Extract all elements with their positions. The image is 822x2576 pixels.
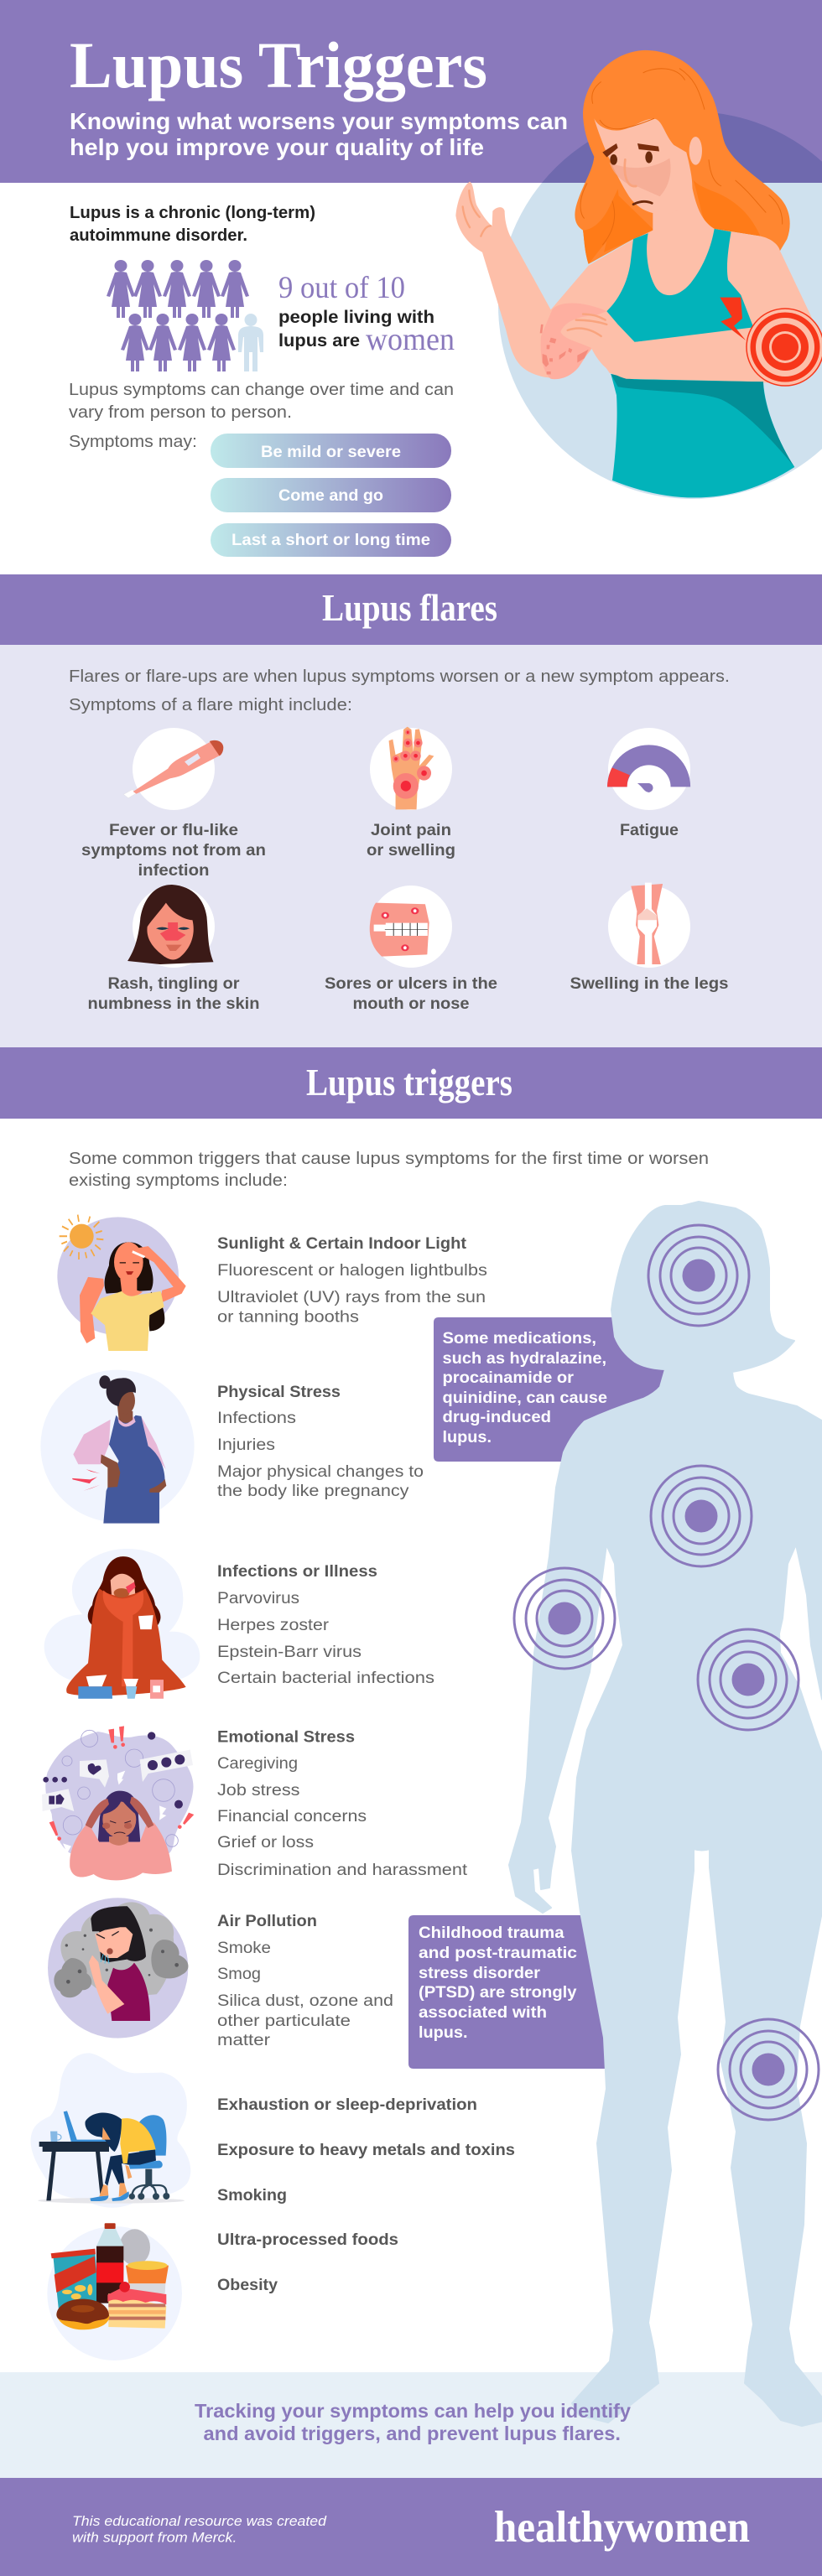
list: physical stress	[217, 1384, 424, 1500]
callout: medications text	[443, 1330, 607, 1446]
header band	[0, 0, 822, 183]
callout: medications background	[434, 1317, 671, 1462]
list: physical stress: Infections	[217, 1410, 296, 1427]
intro definition	[70, 203, 315, 245]
list: other triggers: Exhaustion or sleep-deprivation	[217, 2096, 477, 2114]
icon circles	[133, 728, 690, 968]
text block: symptoms change	[69, 380, 454, 451]
pill: be mild or severe: Be mild or severe	[261, 444, 401, 461]
label: fever: symptoms not from an	[81, 841, 266, 860]
icon: thermometer	[123, 740, 223, 798]
statistic: 9 out of 10	[278, 271, 455, 357]
list: infections or illness: Parvovirus	[217, 1590, 299, 1607]
list: sunlight and indoor light: Fluorescent or halogen lightbulbs	[217, 1262, 487, 1280]
list: emotional stress: Emotional Stress	[217, 1729, 355, 1746]
body silhouette	[509, 1202, 822, 2426]
text block: symptoms change: Lupus symptoms can change over time and can	[69, 380, 454, 399]
icon: hand with joint pain	[389, 727, 434, 809]
illustration: woman with rash and arm pain	[455, 50, 815, 497]
list: sunlight and indoor light: Sunlight & Certain Indoor Light	[217, 1235, 467, 1253]
section heading: lupus flares	[0, 574, 822, 645]
section heading: lupus triggers: Lupus triggers	[306, 1061, 512, 1104]
panel: lupus triggers	[0, 1047, 822, 2478]
icon: bullseye abdomen	[698, 1629, 799, 1730]
list: emotional stress: Discrimination and harassment	[217, 1862, 468, 1879]
sponsor note: This educational resource was created	[72, 2514, 327, 2529]
label: rash: numbness in the skin	[87, 995, 260, 1013]
list: physical stress: Injuries	[217, 1436, 275, 1454]
subtitle	[70, 108, 568, 160]
pill: be mild or severe	[211, 434, 451, 468]
callout: trauma text: and post-traumatic	[419, 1945, 577, 1962]
panel: header and introduction	[0, 0, 822, 557]
callout: trauma text: associated with	[419, 2004, 547, 2022]
label: rash: Rash, tingling or	[107, 974, 240, 993]
illustration: exhausted woman at desk	[31, 2053, 190, 2208]
pill: come and go	[211, 478, 451, 512]
label: swelling: Swelling in the legs	[570, 974, 729, 993]
label: fatigue: Fatigue	[620, 821, 679, 839]
list: other triggers: Ultra-processed foods	[217, 2231, 398, 2249]
text block: symptoms change: Symptoms may:	[69, 432, 197, 451]
list: other triggers: Obesity	[217, 2277, 278, 2294]
sponsor note: with support from Merck.	[72, 2531, 237, 2546]
list: infections or illness: Epstein-Barr virus	[217, 1644, 362, 1661]
list: physical stress: Physical Stress	[217, 1384, 341, 1401]
subtitle: Knowing what worsens your symptoms can	[70, 108, 568, 134]
flares intro text: Flares or flare-ups are when lupus symptoms worsen or a new symptom appears.	[69, 667, 730, 686]
pill: last a short or long time: Last a short or long time	[232, 532, 430, 549]
list: other triggers	[217, 2096, 515, 2294]
icon: bullseye head	[648, 1225, 749, 1326]
callout: trauma text: stress disorder	[419, 1965, 541, 1982]
list: other triggers: Smoking	[217, 2187, 287, 2205]
callout: medications text: procainamide or	[443, 1369, 575, 1387]
list: sunlight and indoor light	[217, 1235, 487, 1327]
list: sunlight and indoor light: or tanning booths	[217, 1308, 359, 1327]
pill: come and go: Come and go	[278, 487, 383, 505]
list: emotional stress: Grief or loss	[217, 1834, 314, 1852]
icon: bullseye arm	[514, 1568, 615, 1669]
list: air pollution: other particulate	[217, 2012, 351, 2030]
list: emotional stress: Job stress	[217, 1782, 300, 1800]
callout: medications text: such as hydralazine,	[443, 1350, 606, 1368]
label: rash	[87, 974, 260, 1013]
footer band	[0, 2478, 822, 2576]
flares background	[0, 645, 822, 1047]
sponsor note	[72, 2514, 327, 2546]
illustration: woman in sunlight	[57, 1215, 186, 1351]
label: sores	[325, 974, 497, 1013]
label: fever: infection	[138, 861, 210, 880]
illustration: sick woman in blanket	[44, 1549, 200, 1699]
list: emotional stress: Financial concerns	[217, 1808, 367, 1826]
icon: face with facial rash	[127, 885, 213, 964]
illustration circle backdrop	[498, 112, 822, 499]
subtitle: help you improve your quality of life	[70, 134, 484, 160]
callout: trauma text: Childhood trauma	[419, 1924, 564, 1942]
illustration: pregnant woman with back pain	[40, 1370, 195, 1524]
label: joint pain: or swelling	[367, 841, 455, 860]
tracking message: and avoid triggers, and prevent lupus flares.	[203, 2423, 621, 2444]
list: emotional stress	[217, 1729, 468, 1879]
list: physical stress: Major physical changes to	[217, 1463, 424, 1481]
section heading: lupus flares: Lupus flares	[322, 586, 497, 629]
label: joint pain: Joint pain	[371, 821, 451, 839]
list: sunlight and indoor light: Ultraviolet (UV) rays from the sun	[217, 1289, 486, 1306]
list: air pollution: Smog	[217, 1966, 261, 1983]
callout: medications text: Some medications,	[443, 1330, 596, 1348]
statistic: 9 out of 10: women	[366, 322, 455, 357]
list: air pollution: Air Pollution	[217, 1913, 317, 1930]
tracking message	[195, 2400, 631, 2444]
illustration: woman coughing in air pollution	[48, 1898, 188, 2038]
list: other triggers: Exposure to heavy metals and toxins	[217, 2142, 515, 2159]
label: sores: Sores or ulcers in the	[325, 974, 497, 993]
panel: lupus flares	[0, 574, 822, 1047]
statistic: 9 out of 10: people living with	[278, 308, 434, 327]
icon: fatigue gauge	[607, 745, 690, 792]
circle overlap on header	[542, 112, 822, 183]
list: air pollution: matter	[217, 2032, 271, 2049]
list: infections or illness	[217, 1563, 434, 1687]
list: infections or illness: Certain bacterial infections	[217, 1670, 434, 1687]
intro definition: Lupus is a chronic (long-term)	[70, 203, 315, 222]
tracking band	[0, 2372, 822, 2478]
list: air pollution: Smoke	[217, 1940, 271, 1957]
flares intro text	[69, 667, 730, 714]
icon: bullseye chest	[651, 1466, 752, 1566]
callout: medications text: lupus.	[443, 1429, 492, 1446]
triggers intro text	[69, 1149, 709, 1190]
panel: footer	[0, 2478, 822, 2576]
statistic: 9 out of 10: lupus are	[278, 331, 360, 351]
label: joint pain	[367, 821, 455, 860]
list: air pollution: Silica dust, ozone and	[217, 1992, 393, 2010]
callout: medications text: quinidine, can cause	[443, 1389, 607, 1407]
list: infections or illness: Infections or Illness	[217, 1563, 377, 1581]
tracking message: Tracking your symptoms can help you identify	[195, 2400, 631, 2422]
intro definition: autoimmune disorder.	[70, 226, 247, 245]
triggers intro text: existing symptoms include:	[69, 1171, 288, 1190]
icon: ten people pictogram	[107, 260, 263, 371]
pill: last a short or long time	[211, 523, 451, 557]
flares intro text: Symptoms of a flare might include:	[69, 695, 352, 714]
label: fever: Fever or flu-like	[109, 821, 238, 839]
icon: mouth with sores	[370, 903, 429, 957]
callout: trauma text	[419, 1924, 577, 2042]
icon: pain bullseye on arm	[747, 309, 822, 386]
list: physical stress: the body like pregnancy	[217, 1483, 409, 1500]
label: fever	[81, 821, 266, 880]
illustration: ultra-processed foods	[47, 2223, 182, 2360]
logo: healthywomen: healthywomen	[494, 2503, 750, 2552]
title: Lupus Triggers	[70, 29, 487, 101]
callout: trauma text: (PTSD) are strongly	[419, 1984, 577, 2002]
statistic: 9 out of 10: 9 out of 10	[278, 271, 405, 305]
icon: bullseye knee	[718, 2019, 819, 2120]
callout: trauma background	[408, 1915, 612, 2069]
icon: swollen leg	[631, 883, 663, 966]
list: infections or illness: Herpes zoster	[217, 1617, 330, 1634]
triggers intro text: Some common triggers that cause lupus symptoms for the first time or worsen	[69, 1149, 709, 1168]
callout: trauma text: lupus.	[419, 2024, 468, 2042]
text block: symptoms change: vary from person to person.	[69, 402, 292, 422]
list: emotional stress: Caregiving	[217, 1755, 298, 1773]
section heading: lupus triggers	[0, 1047, 822, 1119]
label: sores: mouth or nose	[352, 995, 470, 1013]
callout: medications text: drug-induced	[443, 1409, 551, 1426]
illustration: emotionally stressed woman	[42, 1726, 194, 1880]
list: air pollution	[217, 1913, 393, 2049]
